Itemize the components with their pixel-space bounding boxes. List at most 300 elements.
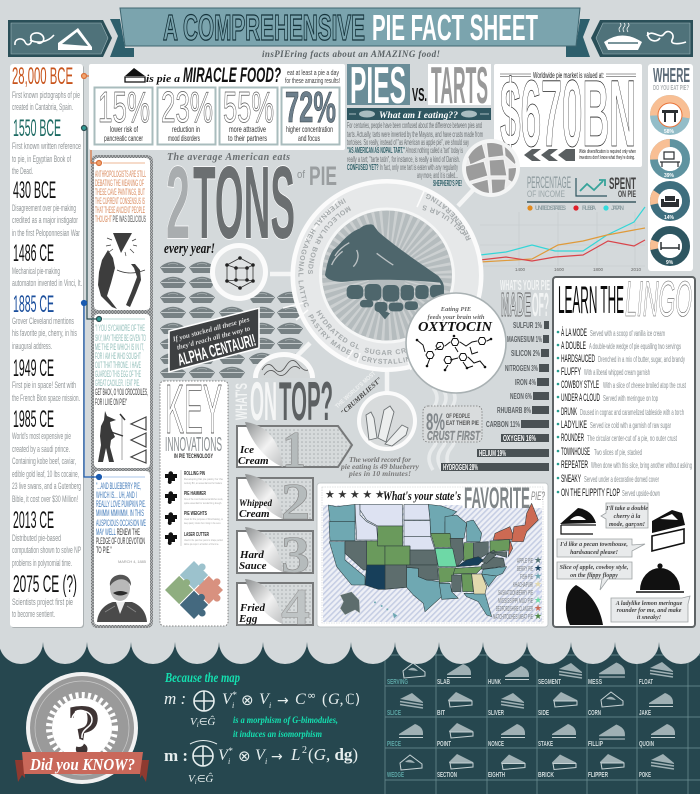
lingo terms: ON THE FLIPPITY FLOP <box>561 487 620 499</box>
lingo terms: FLUFFY <box>561 366 581 378</box>
callout: crust first <box>423 406 482 443</box>
row 4 slices <box>387 754 674 779</box>
430 BCE: in the first Peloponnesian War <box>12 228 80 238</box>
text: "I YOU SYCAMORE OF THE <box>95 323 145 333</box>
panel: market value <box>494 61 642 167</box>
row 2 slices: CORN <box>588 710 601 717</box>
tarts box <box>428 57 491 115</box>
stat 23%: 23% <box>161 83 213 132</box>
formula 1: C <box>295 691 306 708</box>
legend <box>527 205 624 212</box>
formula 2: i <box>195 778 197 786</box>
innovation: laser cutter <box>165 532 223 546</box>
formula 1: ( <box>322 691 327 708</box>
chart: names for a slice <box>385 640 700 794</box>
quote: grover cleveland <box>94 471 150 625</box>
of pie: PIE <box>309 161 337 191</box>
map legend: ★ <box>534 555 542 565</box>
row 4 slices: BRICK <box>538 772 554 779</box>
1985 CE: 23 live swans, and a Gutenberg <box>12 481 81 491</box>
chart: percentage of income spent on pie: SPENT <box>609 174 636 193</box>
ring labels <box>298 194 471 364</box>
1550 BCE <box>12 115 81 176</box>
bar labels: SULFUR 1% <box>513 321 542 330</box>
stat 15% <box>94 83 152 144</box>
donut: desk: 39% <box>664 173 675 179</box>
timeline connectors <box>82 74 102 480</box>
map legend <box>493 555 542 621</box>
1985 CE <box>12 406 81 504</box>
430 BCE: credited as a major instigator <box>12 215 78 225</box>
innovation: pie hammer: quite essential for tenderizing dough. <box>184 501 222 505</box>
card: ice cream <box>237 422 352 479</box>
1949 CE: 1949 CE <box>13 355 54 382</box>
molecule diagram <box>416 335 492 371</box>
card: whipped cream: Whipped <box>239 498 273 508</box>
icon: whipped slice <box>560 508 596 534</box>
stat 15%: pancreatic cancer <box>104 133 143 143</box>
speech bubble: cherry a la mode: I'll take a double <box>605 506 648 512</box>
heading: MIRACLE FOOD? <box>183 64 281 87</box>
quote: grover cleveland: MAY WELL RENEW THE <box>96 527 140 537</box>
innovation: pie hammer <box>165 491 223 505</box>
axis labels: 1800 <box>593 267 604 272</box>
28,000 BCE: 28,000 BCE <box>12 63 73 90</box>
axis labels: 2010 <box>631 267 642 272</box>
row 2 slices <box>387 692 673 717</box>
formula 1: V <box>222 691 234 708</box>
2075 CE <box>12 571 77 619</box>
2075 CE: to become sentient. <box>12 609 55 619</box>
on top heading: ON <box>250 370 277 432</box>
formula 1: ∞ <box>307 689 316 702</box>
stat 55% <box>220 83 278 144</box>
innovation: laser cutter: lattice pie tops in a fraction of the time. <box>184 542 219 546</box>
row 2 slices: SIDE <box>538 710 549 717</box>
1550 BCE: First known written reference <box>12 141 81 151</box>
1949 CE <box>12 355 80 403</box>
1550 BCE: the Dead. <box>12 166 33 176</box>
formula 2: ∈ <box>197 774 205 785</box>
alpha centauri sign: If you stacked all these pies <box>171 315 251 344</box>
28,000 BCE <box>12 63 80 112</box>
1885 CE: his favorite pie, cherry, in his <box>12 328 77 338</box>
math: because the map <box>164 671 360 786</box>
2013 CE: 2013 CE <box>13 507 54 534</box>
row 3 slices: POINT <box>437 741 451 748</box>
map legend: NATCHITOCHES MEAT PIE <box>493 614 533 621</box>
donut: table <box>654 99 686 135</box>
bar labels: NITROGEN 3% <box>505 364 538 373</box>
portrait: grover cleveland <box>97 575 147 622</box>
text: FOR I AM HE WHO SOUGHT <box>95 351 141 361</box>
speech bubble: lemon rounder: A ladylike lemon meringue <box>615 601 683 607</box>
formula 1: ⊗ <box>241 691 254 709</box>
map title: PIE? <box>531 489 545 503</box>
quote: grover cleveland: MMMM MMMMM. IN THIS <box>96 508 144 518</box>
pies vs tarts body text: "AS AMERICAN AS NOPAL TART." Almost nothing called a 'tart' today is <box>347 146 463 155</box>
row 4 slices: SECTION <box>437 772 457 779</box>
map title: ★★★★★ <box>325 489 387 501</box>
2013 CE: problems in polynomial time. <box>12 558 72 568</box>
chart heading <box>527 173 636 202</box>
row 3 slices <box>387 723 675 748</box>
stat 55%: more attractive <box>229 124 266 134</box>
crunchiest callout: THE WORLD'S MOST <box>335 370 378 410</box>
430 BCE: 430 BCE <box>13 177 56 204</box>
card: fried egg: Fried <box>239 602 266 614</box>
speech bubble: apple cowboy: on the flippy floppy <box>570 573 618 579</box>
badge: did you know <box>15 672 149 784</box>
ring labels: CRYSTALLINE <box>362 356 408 364</box>
legend: RUSSIA <box>582 206 597 212</box>
map title: What's your state's <box>383 488 461 503</box>
chart: percentage of income spent on pie <box>480 173 645 272</box>
text: GREAT CACKLER. I EAT PIE. <box>95 378 140 388</box>
donut: sofa: 14% <box>664 215 675 221</box>
lingo terms: SNEAKY <box>561 473 581 485</box>
quote: cave paintings: THOUGHT PIE WAS DELICIOUS <box>95 214 146 224</box>
bar labels: RHUBARB 8% <box>497 406 531 415</box>
speech bubble: apple cowboy: Slice of apple, cowboy style, <box>560 565 628 571</box>
callout: crust first: 8% <box>426 409 445 436</box>
chart heading: OF INCOME <box>527 189 565 199</box>
speech bubble: pecan townhouse <box>557 539 645 557</box>
pies vs tarts body text: really a tart; "tarte tatin", for instance, is really a kind of Danish. <box>347 155 460 164</box>
text: REALLY LOVE PUMPKIN PIE. <box>96 499 146 509</box>
row 4 slices: POKE <box>639 772 651 779</box>
text: THAT THESE ANCIENT PEOPLE <box>95 205 145 215</box>
2013 CE: Distributed pie-based <box>12 533 61 543</box>
speech bubble: cherry a la mode <box>601 503 648 528</box>
key heading <box>165 370 222 460</box>
note: investors don't know what they're doing. <box>579 155 635 161</box>
1949 CE: First pie in space! Sent with <box>12 380 76 390</box>
1486 CE: 1486 CE <box>13 240 54 267</box>
lingo terms: Two slices of pie, stacked <box>594 448 642 457</box>
left ribbon fold <box>110 19 134 57</box>
1949 CE: the French Bion space mission. <box>12 393 80 403</box>
formula 1: V <box>259 691 271 708</box>
world record note: pies in 10 minutes! <box>348 469 411 478</box>
stat 23% <box>158 83 216 144</box>
main ribbon <box>120 8 580 46</box>
1985 CE: edible gold leaf, 10 lbs cocaine, <box>12 469 79 479</box>
formula 1: * <box>232 690 237 700</box>
1885 CE: Grover Cleveland mentions <box>12 316 74 326</box>
1985 CE: World's most expensive pie <box>12 431 71 441</box>
formula 2: → <box>271 749 283 765</box>
panel: pies vs tarts <box>347 57 491 188</box>
donut: bed <box>651 227 689 266</box>
lingo terms: UNDER A CLOUD <box>561 392 600 404</box>
bar labels <box>443 321 542 472</box>
row 3 slices: QUOIN <box>639 741 654 748</box>
panel: two tons of pie: TONS <box>193 145 295 260</box>
card: whipped cream <box>237 474 313 531</box>
formula 2: L <box>290 745 300 764</box>
footer band <box>0 640 700 794</box>
stat 23%: reduction in <box>172 124 200 134</box>
row 1 slices: HUNK <box>488 679 501 686</box>
grid <box>480 212 645 266</box>
oxytocin circle <box>406 293 506 393</box>
formula 2 <box>164 740 358 786</box>
icon: pie slice <box>325 224 444 319</box>
bar labels: CARBON 11% <box>486 420 520 429</box>
bars <box>441 321 549 471</box>
430 BCE: Disagreement over pie-making <box>12 203 76 213</box>
panel: where do you eat pie <box>648 64 693 271</box>
row 3 slices: FILLIP <box>588 741 603 748</box>
panel: timeline <box>10 63 84 628</box>
row 1 slices: FLOAT <box>639 679 653 686</box>
formula 1: V <box>190 716 197 728</box>
legend: JAPAN <box>611 206 624 212</box>
row 1 slices: SEGMENT <box>538 679 561 686</box>
axis labels: 1600 <box>554 267 565 272</box>
card: hard sauce: Sauce <box>239 560 267 572</box>
connector struts <box>270 190 473 395</box>
oxytocin text: feeds your brain with <box>428 314 485 321</box>
row 2 slices: BIT <box>437 710 446 717</box>
text: GUARDED THIS EGG OF THE <box>95 369 141 379</box>
ring labels: CELLULAR STRUCTURE <box>422 206 465 234</box>
panel: two tons of pie <box>160 145 337 378</box>
row 2 slices: JAKE <box>639 710 651 717</box>
morphism note: is a morphism of G-bimodules, <box>233 715 338 725</box>
panel: key innovations <box>160 370 230 626</box>
text: INNOVATIONS <box>165 434 222 456</box>
key heading: IN PIE TECHNOLOGY <box>174 454 213 460</box>
formula 2: V <box>255 747 267 764</box>
diagram: pie anatomy <box>283 179 484 372</box>
lingo terms: TOWNHOUSE <box>561 446 590 458</box>
1885 CE: 1885 CE <box>13 291 54 318</box>
chart: what is your pie made of <box>441 277 550 472</box>
2075 CE: Scientists project first pie <box>12 597 73 607</box>
formula 2: V <box>218 747 230 764</box>
made of heading <box>500 277 550 323</box>
2013 CE: computation shown to solve NP <box>12 545 81 555</box>
1985 CE: 1985 CE <box>13 406 54 433</box>
ring labels: PASTRY MADE OF <box>308 314 359 358</box>
map title <box>325 482 545 515</box>
chart heading: PERCENTAGE <box>527 173 571 192</box>
formula 1: i <box>269 701 271 710</box>
row 4 slices: FLIPPER <box>588 772 608 779</box>
row 3 slices: STAKE <box>538 741 553 748</box>
formula 2: V <box>188 773 195 785</box>
map legend: APPLE PIE <box>517 558 533 565</box>
icon: sugar crystals <box>357 391 417 451</box>
speech bubble: lemon rounder: it sneaky! <box>637 615 661 621</box>
panel: pies vs tarts: tarts. Actually, tarts were invented by the Mayans, and have crusts made from <box>347 130 483 139</box>
of pie: of <box>297 169 306 181</box>
crunchiest callout: "CRUMBLIEST" <box>339 376 384 417</box>
innovation: laser cutter: LASER CUTTER <box>184 532 209 538</box>
map title: FAVORITE <box>464 482 530 515</box>
world record note: The world record for <box>349 455 411 464</box>
chevrons <box>524 149 575 161</box>
formula 1: ℂ) <box>345 692 360 708</box>
bar labels: NEON 6% <box>510 392 532 401</box>
header banner <box>8 7 693 57</box>
panel: timeline: 2075 CE (?) <box>13 571 77 598</box>
1486 CE: automaton invented in Vinci, It. <box>12 278 82 288</box>
map legend: BERRY PIE <box>517 566 533 573</box>
quote: egyptian book of the dead: FOR I LIVE ON PIE!" <box>95 397 127 407</box>
row 2 slices: SLICE <box>387 710 401 717</box>
stat 15%: 15% <box>98 83 150 132</box>
map legend: KHACHAPURI <box>513 582 533 589</box>
title: PIE FACT SHEET <box>372 7 538 48</box>
430 BCE <box>12 177 80 238</box>
1985 CE: Containing kobe beef, caviar, <box>12 456 76 466</box>
text: OUT THAT THRONE. I HAVE <box>95 360 141 370</box>
ribbon: Did you KNOW? <box>29 755 135 774</box>
axis labels <box>515 267 642 272</box>
formula 1: → <box>277 693 289 709</box>
ring labels: SUGAR CRUST <box>364 348 406 356</box>
pie stacks <box>160 262 303 378</box>
donut: table: 58% <box>664 129 675 135</box>
icon: rounder <box>566 585 603 625</box>
ring labels: HYDRATED GLUTEN <box>316 310 359 350</box>
map: US states <box>328 503 538 618</box>
text: WHAT'S YOUR PIE <box>500 277 550 294</box>
axis labels: 1400 <box>515 267 526 272</box>
1985 CE: Bible, it cost over $30 Million! <box>12 494 78 504</box>
formula 2: 2 <box>302 745 307 756</box>
card: ice cream: Cream <box>238 455 269 467</box>
quote: grover cleveland: WHICH IS... UH, AND I <box>96 490 137 500</box>
stat 15%: lower risk of <box>110 124 138 134</box>
innovation: pie weights: keep pastry crusts from rising in the oven. <box>184 521 221 525</box>
innovation: pie weights <box>165 511 223 525</box>
panel: miracle food <box>89 64 345 150</box>
text: GET BACK, O YOU CROCODILES, <box>95 387 148 397</box>
lingo terms: HARDSAUCED <box>561 353 595 365</box>
bar labels: HYDROGEN 28% <box>443 463 478 472</box>
text: SKY, MAY THERE BE GIVEN TO <box>95 333 146 343</box>
formula 2: (G, dg) <box>308 745 358 764</box>
stat 72%: 72% <box>285 83 336 132</box>
map legend: ★ <box>534 587 542 597</box>
icon: puzzle pieces <box>165 557 230 623</box>
formula 1: m : <box>164 689 186 708</box>
innovation: laser cutter: Used in the past few years to shape perfect <box>184 538 223 542</box>
row 2 slices: SLIVER <box>488 710 504 717</box>
lingo bullets <box>557 331 559 493</box>
panel: historic quotes <box>91 155 153 628</box>
formula 2: m : <box>164 746 188 765</box>
innovation: rolling pin: Developing flat pie pastry for the <box>184 477 223 481</box>
row 4 slices: WEDGE <box>387 772 404 779</box>
1985 CE: created by a saudi prince. <box>12 444 70 454</box>
panel: two tons of pie: 2 <box>166 145 190 260</box>
innovation: pie weights: PIE WEIGHTS <box>184 511 207 517</box>
card: whipped cream: 2 <box>281 474 310 531</box>
innovation: rolling pin: century BC, an essential tool for bakers <box>184 481 222 485</box>
note: Wide diversification is required only when <box>579 149 636 155</box>
pies vs tarts body text: tortoises. So really, instead of "as American as apple pie", we should say <box>347 138 469 147</box>
icon: slice <box>125 68 145 82</box>
heading: for these amazing results! <box>285 78 340 85</box>
pies vs tarts body text: SHEPHERD'S PIE! <box>433 179 462 188</box>
callout: crust first: CRUST FIRST <box>427 428 481 443</box>
formula 2: ⊗ <box>238 747 251 765</box>
text: KEY <box>165 370 222 448</box>
bar labels: OXYGEN 16% <box>503 434 536 443</box>
made of heading: MADE <box>501 286 531 323</box>
1550 BCE: 1550 BCE <box>13 115 61 142</box>
oxytocin text: OXYTOCIN <box>418 320 493 335</box>
wavy steam <box>429 388 455 470</box>
panel: favorite pie map <box>317 482 548 627</box>
speech bubble: pecan townhouse: hardsauced please! <box>570 550 618 556</box>
formula 2: i <box>228 757 230 766</box>
1885 CE: inaugural address. <box>12 341 52 351</box>
speech bubble: pecan townhouse: I'd like a pecan townhouse, <box>559 542 628 548</box>
lingo terms: REPEATER <box>561 459 588 471</box>
pies box <box>347 57 410 115</box>
innovation: pie hammer: PIE HAMMER <box>184 491 206 497</box>
panel: learn the lingo <box>553 271 695 627</box>
bar labels: IRON 4% <box>515 378 536 387</box>
bar labels: SILICON 2% <box>511 349 540 358</box>
formula 1: i <box>232 701 234 710</box>
world record note <box>340 455 420 478</box>
donut: bed: 9% <box>666 260 674 266</box>
row 1 slices <box>387 662 673 686</box>
stat 55%: 55% <box>223 83 274 132</box>
card: ice cream: Ice <box>239 444 254 456</box>
formula 2: i <box>265 757 267 766</box>
chart heading: ON PIE <box>618 189 636 199</box>
28,000 BCE: created in Cantabria, Spain. <box>12 102 73 112</box>
icon: cave painting <box>98 233 145 309</box>
bar labels: MAGNESIUM 1% <box>507 335 542 344</box>
formula 1: G, <box>328 691 344 708</box>
world record note: pie eating is 49 blueberry <box>340 462 420 471</box>
28,000 BCE: First known pictographs of pie <box>12 90 80 100</box>
left plaque with slice icon <box>8 20 112 57</box>
oxytocin text: Eating PIE <box>440 306 472 313</box>
lingo terms: DRUNK <box>561 406 577 418</box>
label: Worldwide pie market is valued at: <box>533 70 604 80</box>
innovation: rolling pin: ROLLING PIN <box>184 471 205 477</box>
stat 72% <box>282 83 340 144</box>
map legend: MISSISSIPPI MUD PIE <box>498 598 533 605</box>
map legend: ★ <box>534 579 542 589</box>
map legend: ★ <box>534 563 542 573</box>
stat 23%: mood disorders <box>168 133 200 143</box>
card: fried egg <box>237 579 313 636</box>
row 3 slices: PIECE <box>387 741 401 748</box>
donut: sofa <box>651 182 689 221</box>
map legend: ★ <box>534 611 542 621</box>
row 1 slices: SERVING <box>387 679 408 686</box>
quote: egyptian book of the dead <box>94 314 150 468</box>
lingo terms: A DOUBLE <box>561 340 586 352</box>
row 1 slices: MESS <box>588 679 602 686</box>
speech bubble: lemon rounder: rounder for me, and make <box>617 608 682 614</box>
subtitle: insPIEring facts about an AMAZING food! <box>262 49 440 59</box>
panel: what's on top: TOP? <box>279 370 333 432</box>
1486 CE: Mechanical pie-making <box>12 266 60 276</box>
speech bubble: cherry a la mode: mode, garçon! <box>609 522 645 528</box>
